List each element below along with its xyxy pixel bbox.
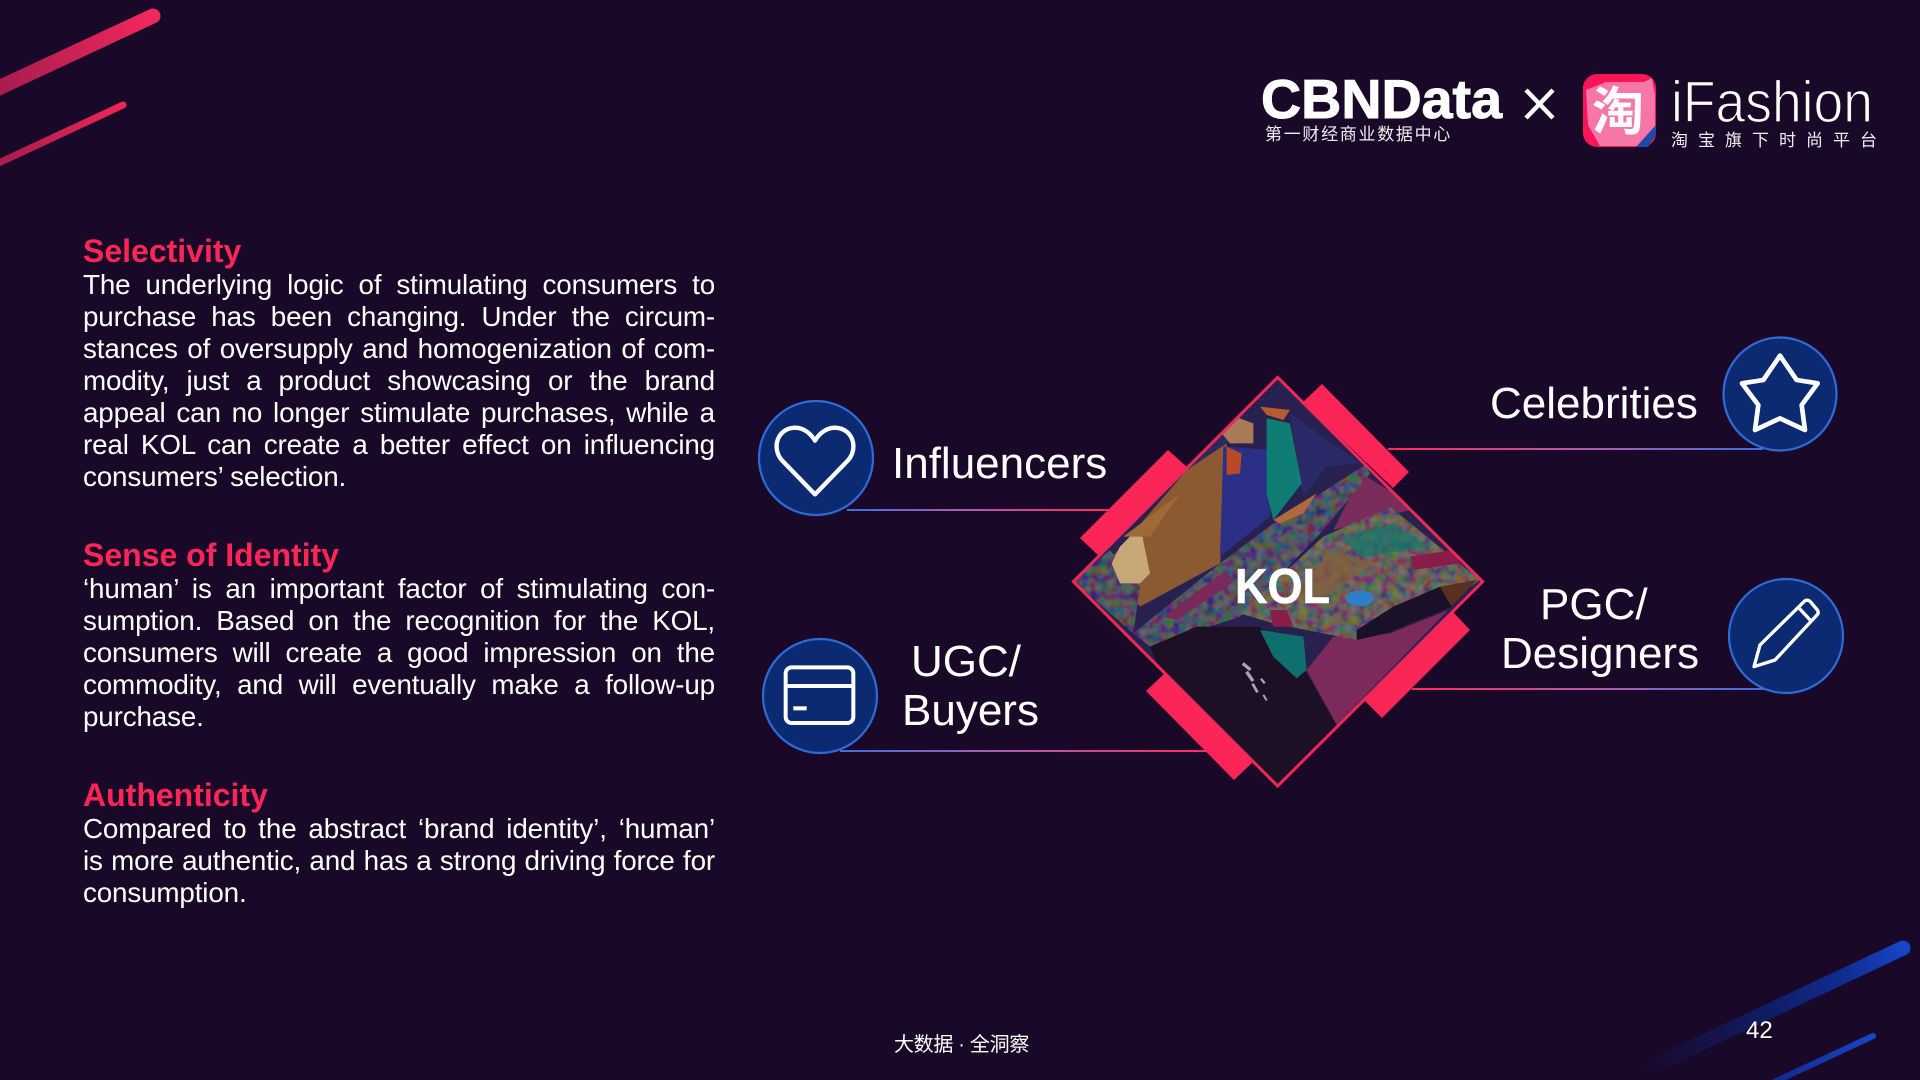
heading: Authenticity: Authenticity xyxy=(83,777,268,813)
label: UGC/ Buyers: Buyers xyxy=(902,686,1039,735)
heading: Selectivity: Selectivity xyxy=(83,233,241,269)
paragraph: Selectivity: purchase has been changing. Under the circum- xyxy=(83,301,715,332)
decorative red streak, top left xyxy=(0,16,153,167)
item: influencers xyxy=(759,401,1107,515)
paragraph: Sense of Identity: commodity, and will eventually make a follow-up xyxy=(83,669,715,700)
logo: CBNData: 第一财经商业数据中心 xyxy=(1265,125,1452,144)
text block: Sense of Identity xyxy=(83,537,715,732)
icon: card xyxy=(763,639,877,753)
text block: Authenticity xyxy=(83,777,715,908)
connector line: influencers xyxy=(847,509,1109,511)
paragraph: Selectivity xyxy=(83,269,716,492)
label: PGC/ Designers xyxy=(1501,580,1699,678)
footer slogan: 大数据 · 全洞察 xyxy=(894,1034,1029,1056)
icon: pencil xyxy=(1729,579,1843,693)
paragraph: Selectivity: stances of oversupply and homogenization of com- xyxy=(83,333,715,364)
logo: iFashion: 淘宝旗下时尚平台 xyxy=(1671,131,1887,150)
item: UGC buyers xyxy=(763,637,1039,753)
label: PGC/ Designers: Designers xyxy=(1501,629,1699,678)
connector line: PGC designers xyxy=(1412,688,1765,690)
label: PGC/ Designers: PGC/ xyxy=(1540,580,1648,629)
logo: Taobao icon: 淘 xyxy=(1592,70,1644,145)
paragraph: Selectivity: consumers’ selection. xyxy=(83,461,346,492)
decorative blue streak, bottom right xyxy=(1623,948,1903,1080)
item: PGC designers xyxy=(1501,579,1843,693)
icon: heart xyxy=(759,401,873,515)
page number: 42 xyxy=(1746,1017,1773,1044)
label: UGC/ Buyers: UGC/ xyxy=(911,637,1022,686)
text block: Selectivity xyxy=(83,233,716,492)
paragraph: Authenticity xyxy=(83,813,715,908)
label: UGC/ Buyers xyxy=(902,637,1039,735)
logo: CBNData: CBNData xyxy=(1261,68,1502,130)
logo: Taobao icon xyxy=(1583,70,1656,147)
logo: iFashion: iFashion xyxy=(1671,70,1873,135)
paragraph: Sense of Identity: sumption. Based on the recognition for the KOL, xyxy=(83,605,715,636)
paragraph: Sense of Identity xyxy=(83,573,715,732)
connector line: UGC buyers xyxy=(840,750,1208,752)
central diamond photo: patterned scarf xyxy=(1070,373,1487,790)
label: Influencers: Influencers xyxy=(892,439,1107,488)
label: Celebrities: Celebrities xyxy=(1490,379,1698,428)
KOL label: KOL xyxy=(1235,560,1330,614)
paragraph: Selectivity: appeal can no longer stimulate purchases, while a xyxy=(83,397,715,428)
pink bars behind diamond xyxy=(1080,384,1470,780)
connector line: celebrities xyxy=(1388,448,1763,450)
paragraph: Selectivity: modity, just a product showcasing or the brand xyxy=(83,365,715,396)
paragraph: Sense of Identity: consumers will create a good impression on the xyxy=(83,637,715,668)
paragraph: Authenticity: consumption. xyxy=(83,877,247,908)
paragraph: Sense of Identity: purchase. xyxy=(83,701,204,732)
paragraph: Selectivity: real KOL can create a better effect on influencing xyxy=(83,429,715,460)
item: celebrities xyxy=(1490,338,1836,450)
paragraph: Authenticity: is more authentic, and has a strong driving force for xyxy=(83,845,715,876)
paragraph: Sense of Identity: ‘human’ is an important factor of stimulating con- xyxy=(83,573,715,604)
paragraph: Authenticity: Compared to the abstract ‘brand identity’, ‘human’ xyxy=(83,813,715,844)
icon: times sign xyxy=(1526,90,1553,118)
paragraph: Selectivity: The underlying logic of stimulating consumers to xyxy=(83,269,715,300)
icon: star xyxy=(1724,338,1836,450)
heading: Sense of Identity: Sense of Identity xyxy=(83,537,339,573)
